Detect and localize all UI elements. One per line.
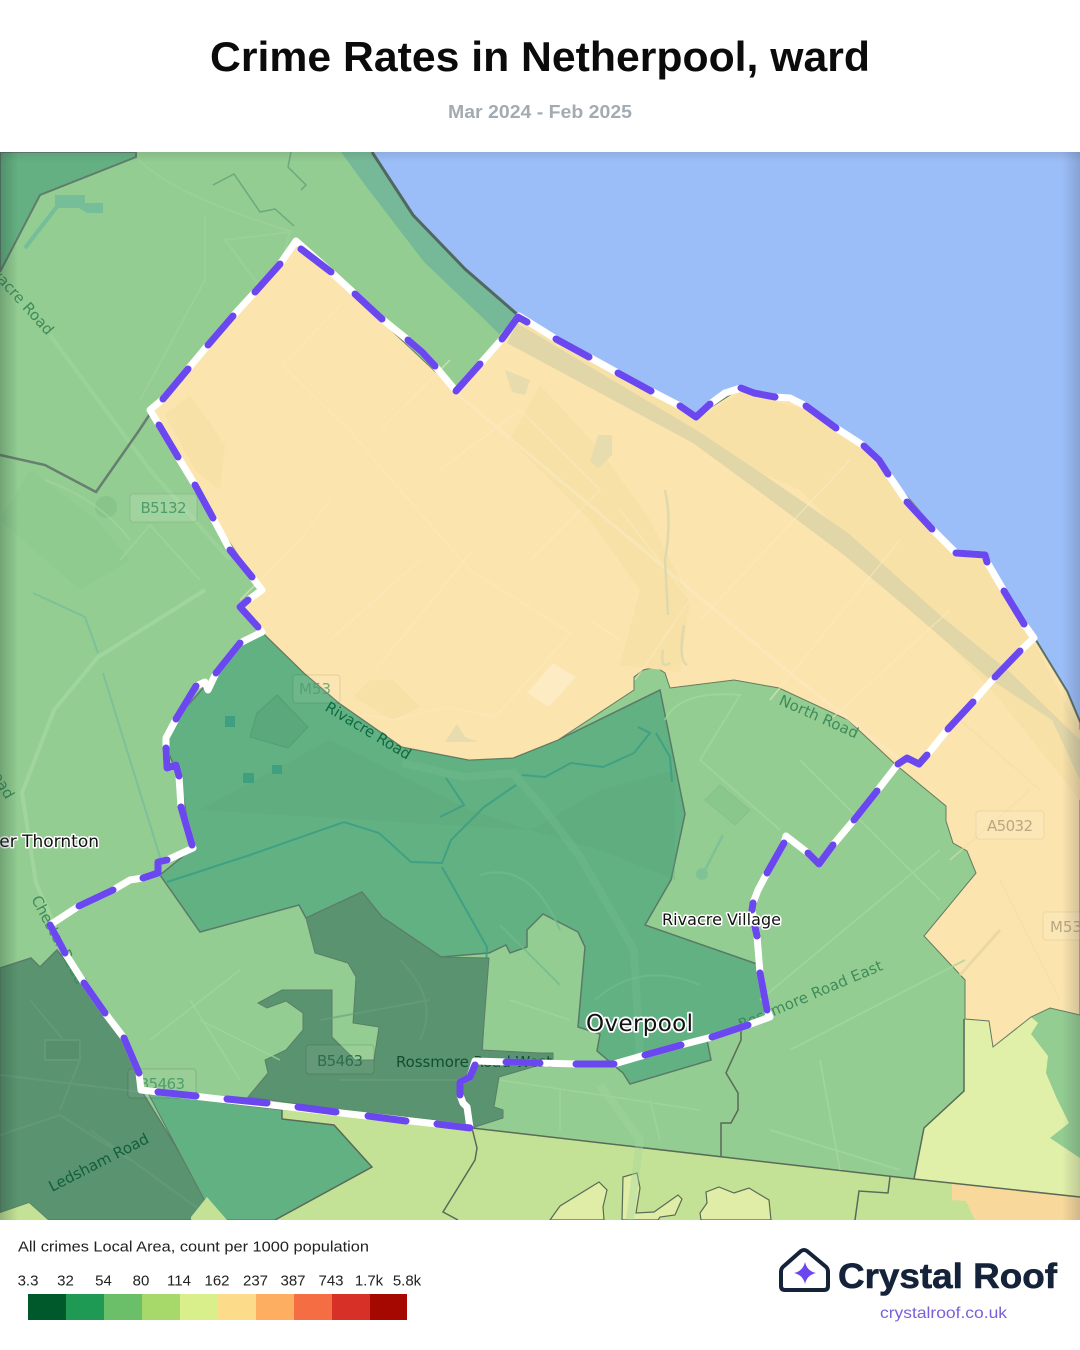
- legend value labels: 80: [133, 1272, 149, 1290]
- legend: [18, 1238, 422, 1320]
- east streams: [662, 490, 1000, 975]
- legend value labels: 387: [280, 1272, 306, 1290]
- lime corner bottom: [191, 1197, 227, 1220]
- legend title: All crimes Local Area, count per 1000 population: [18, 1238, 369, 1256]
- legend value labels: 114: [167, 1272, 191, 1290]
- logo wordmark: Crystal Roof: [838, 1257, 1057, 1296]
- south-west street lines: [0, 960, 460, 1210]
- dark green south-west area: [0, 950, 215, 1220]
- road shield: A5032: [976, 811, 1044, 839]
- road label: Rossmore Road East: Rossmore Road East: [736, 957, 885, 1034]
- road shield: B5132: B5132: [140, 499, 186, 517]
- road shield: A5032: A5032: [987, 817, 1033, 835]
- pale east area: [914, 1017, 1080, 1197]
- legend value labels: 3.3: [18, 1272, 38, 1290]
- legend value labels: 54: [95, 1272, 112, 1290]
- road label: Chester Road: Chester Road: [27, 892, 89, 987]
- choropleth map: [0, 152, 1080, 1220]
- subtitle: date range: Mar 2024 - Feb 2025: [448, 102, 632, 122]
- road label: North Road: North Road: [776, 691, 861, 742]
- yellow area: [150, 241, 1080, 1047]
- title: Crime Rates in Netherpool, ward: [210, 33, 870, 80]
- pale lime patches: [550, 1173, 771, 1220]
- legend value labels: 162: [204, 1272, 230, 1290]
- medium green area: [160, 633, 770, 1084]
- ward boundary: purple dashes: [50, 249, 1024, 1128]
- ward boundary: white line: [50, 241, 1034, 1128]
- road shield: B5463 west: B5463: [139, 1075, 185, 1093]
- dark green area: [248, 892, 553, 1128]
- yellow area roads: [240, 302, 964, 860]
- legend value labels: 5.8k: [393, 1272, 422, 1290]
- icon: house with star: [781, 1250, 828, 1290]
- legend colour scale: [28, 1294, 407, 1320]
- place label: Overpool: Overpool: [586, 1011, 693, 1037]
- base area: light green: [0, 152, 1080, 1220]
- legend value labels: 237: [243, 1272, 268, 1290]
- medium green south area: [148, 1093, 372, 1220]
- ward boundary: [50, 241, 1034, 1128]
- legend value labels: 32: [57, 1272, 74, 1290]
- road label: Ledsham Road: Ledsham Road: [46, 1130, 152, 1196]
- place label: Rivacre Village: Rivacre Village: [662, 910, 781, 929]
- lime area: [276, 1110, 975, 1220]
- top-left details: [0, 152, 307, 494]
- road shield: M53 east: [1043, 912, 1080, 940]
- lighter village details: [150, 694, 965, 1220]
- south boundary lines: [275, 1019, 1080, 1220]
- legend value labels: [18, 1272, 422, 1290]
- legend value labels: 1.7k: [355, 1272, 384, 1290]
- coastline: [372, 152, 1080, 723]
- website url: crystalroof.co.uk: [880, 1305, 1008, 1322]
- legend value labels: 743: [318, 1272, 344, 1290]
- road shield: M53: M53: [299, 680, 331, 698]
- road shield: B5463 centre: B5463: [317, 1052, 363, 1070]
- coastal strip: [341, 152, 519, 334]
- lime small corners: [0, 1203, 48, 1220]
- top-left medium area: [0, 152, 136, 272]
- road label: Rivacre Road: Rivacre Road: [322, 698, 414, 763]
- road shield: B5463 centre: [306, 1045, 374, 1074]
- logo: [781, 1250, 1057, 1322]
- road label: Rossmore Road West: Rossmore Road West: [396, 1053, 552, 1071]
- woodland shading and rivers: [167, 695, 700, 1060]
- road shield: M53: [293, 675, 340, 703]
- sea: [372, 152, 1080, 723]
- yellow area shading: [445, 324, 1080, 800]
- road shield: B5132: [130, 494, 197, 522]
- map edge shading: [0, 152, 1080, 1220]
- west side roads: [22, 480, 205, 933]
- peach area: [952, 1183, 1080, 1220]
- road shield: B5463 west: [128, 1069, 196, 1098]
